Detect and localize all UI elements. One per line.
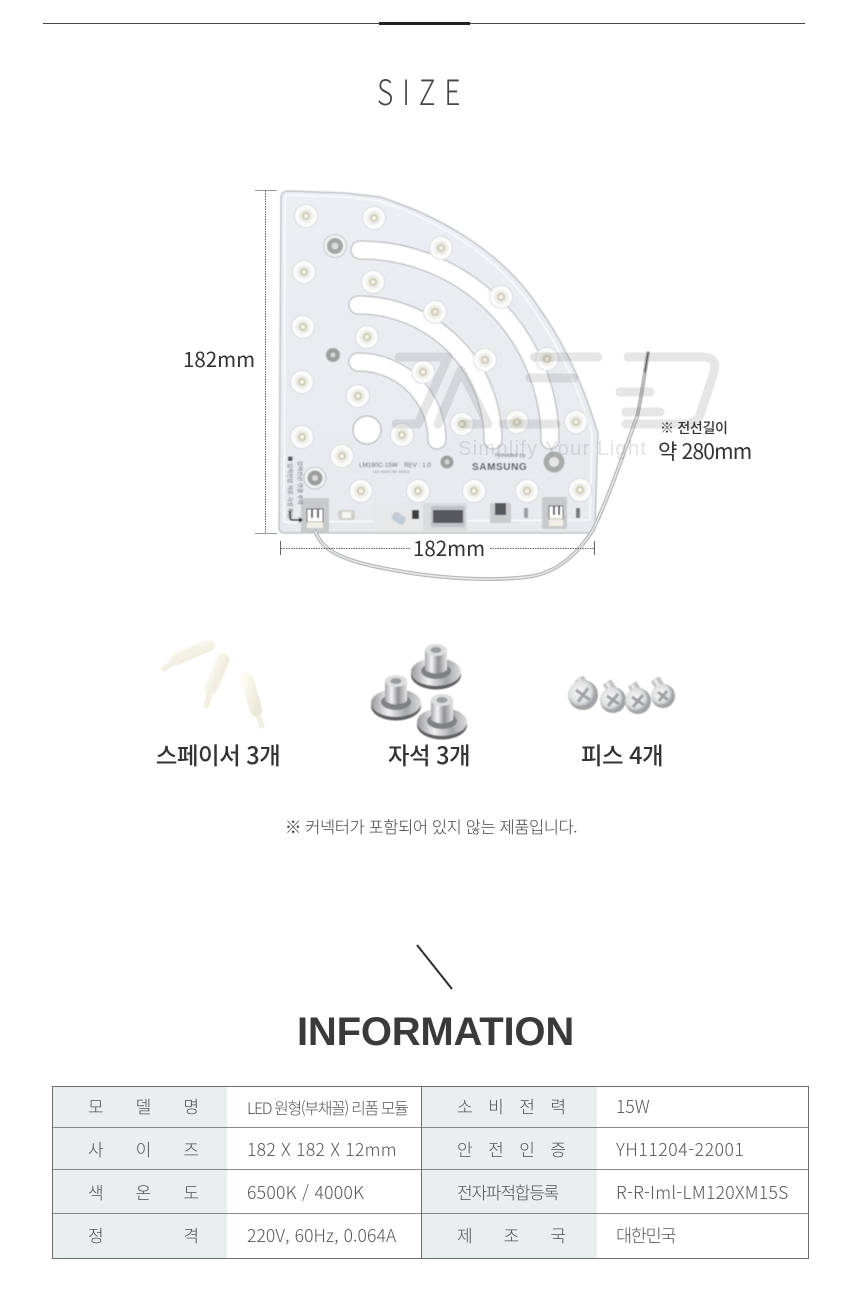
wire length note: 약 280mm — [658, 436, 751, 466]
row: color temperature — [88, 1179, 199, 1204]
watermark logo — [396, 357, 715, 424]
board printing: REV : 1.0 — [404, 462, 431, 469]
mounting hole — [353, 416, 381, 444]
board printing: 입력전선 연결 주의 — [296, 461, 304, 505]
row: model name — [88, 1093, 199, 1118]
board printing: LED SMDS 5W 20W15 — [373, 470, 409, 474]
row: rating: 격 — [183, 1222, 199, 1247]
icon: magnets — [371, 644, 467, 740]
row: color temperature: 온 — [136, 1179, 151, 1204]
LEDs — [290, 204, 592, 503]
watermark tagline: Simplify Your Light — [458, 438, 647, 460]
row: color temperature: 색 — [88, 1179, 104, 1204]
label: screws: 피스 4개 — [581, 737, 663, 771]
board — [279, 191, 598, 533]
row: rating: 정 — [88, 1222, 104, 1247]
slots — [358, 250, 550, 440]
specification table: 15W — [616, 1094, 650, 1119]
row: country of manufacture: 제 — [457, 1222, 473, 1247]
board printing: LM180C-15W — [359, 462, 398, 469]
row: country of manufacture: 국 — [550, 1222, 566, 1247]
row: size: 즈 — [183, 1136, 199, 1161]
row: safety certification — [457, 1136, 566, 1161]
connector note: ※ 커넥터가 포함되어 있지 않는 제품입니다. — [285, 814, 577, 838]
dimension label: height: 182mm — [183, 343, 255, 373]
label: magnets: 자석 3개 — [388, 737, 470, 771]
row: power: 력 — [550, 1093, 566, 1118]
standoffs — [304, 234, 564, 489]
right connector — [542, 497, 567, 529]
row: safety certification: 인 — [519, 1136, 535, 1161]
table borders — [52, 1086, 809, 1259]
wire — [315, 353, 648, 579]
row: size — [88, 1136, 199, 1161]
specification table: 182 X 182 X 12mm — [247, 1137, 397, 1162]
row: EMC registration: 전자파적합등록 — [457, 1179, 558, 1204]
icon: screws — [568, 678, 675, 714]
left connector — [290, 498, 329, 533]
row: safety certification: 증 — [550, 1136, 566, 1161]
accessories photos — [161, 640, 676, 740]
row: power: 소 — [457, 1093, 473, 1118]
specification table: YH11204-22001 — [616, 1137, 744, 1162]
row: size: 이 — [136, 1136, 151, 1161]
dimension label: width: 182mm — [413, 532, 485, 562]
heading: SIZE: SIZE — [377, 65, 469, 116]
row: rating — [88, 1222, 199, 1247]
wire length note — [658, 418, 751, 466]
row: power — [457, 1093, 566, 1118]
row: country of manufacture — [457, 1222, 566, 1247]
specification table — [52, 1086, 809, 1259]
label column backgrounds — [53, 1087, 227, 1258]
board printing: Provided by — [495, 453, 526, 459]
specification table: 220V, 60Hz, 0.064A — [247, 1223, 396, 1248]
icon: diagonal accent line — [416, 944, 453, 990]
row: safety certification: 전 — [488, 1136, 504, 1161]
wire length note: ※ 전선길이 — [660, 418, 728, 438]
bottom electronics strip — [338, 503, 580, 531]
row: model name: 모 — [88, 1093, 104, 1118]
row: color temperature: 도 — [183, 1179, 199, 1204]
row: model name: 델 — [136, 1093, 151, 1118]
height dimension — [255, 190, 277, 534]
heading: INFORMATION: INFORMATION — [297, 1010, 574, 1054]
width dimension — [280, 541, 594, 555]
row: power: 전 — [519, 1093, 535, 1118]
label: spacers: 스페이서 3개 — [156, 737, 280, 771]
product illustration: LED module with dimensions — [255, 190, 720, 581]
specification table: 대한민국 — [616, 1223, 675, 1248]
specification table: LED 원형(부채꼴) 리폼 모듈 — [247, 1095, 407, 1119]
row: country of manufacture: 조 — [504, 1222, 519, 1247]
specification table: R-R-Iml-LM120XM15S — [616, 1180, 789, 1205]
board printing — [286, 453, 527, 518]
row: model name: 명 — [183, 1093, 199, 1118]
board printing: SAMSUNG — [472, 462, 527, 473]
row: safety certification: 안 — [457, 1136, 473, 1161]
icon: nylon spacers — [164, 645, 262, 726]
row: size: 사 — [88, 1136, 104, 1161]
specification table: 6500K / 4000K — [247, 1180, 364, 1205]
row: power: 비 — [488, 1093, 504, 1118]
board printing: ■ 입력전압 직류 극성 확인 — [286, 456, 294, 518]
top rule — [43, 23, 805, 24]
